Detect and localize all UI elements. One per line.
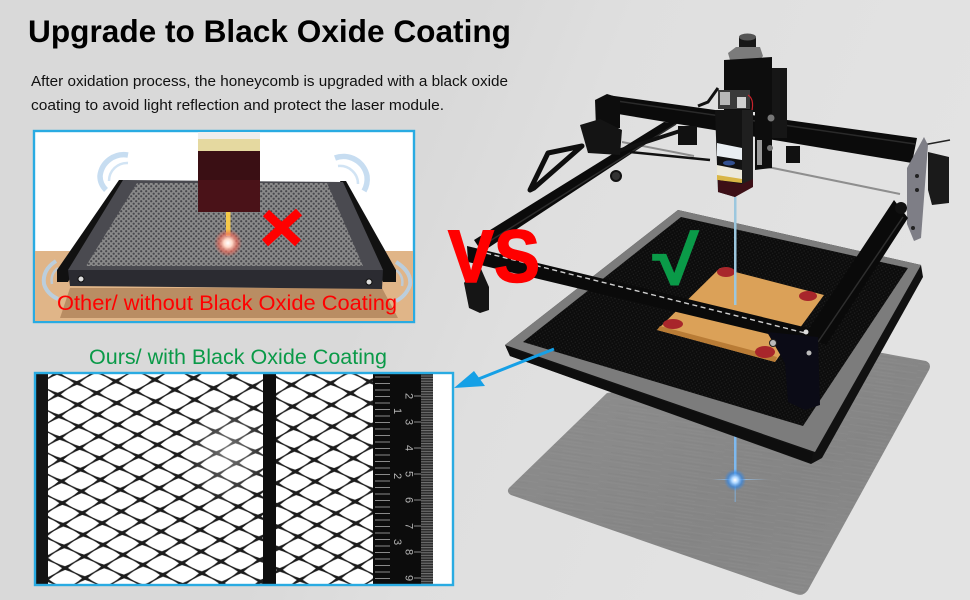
caption: other: Other/ without Black Oxide Coating [57,292,397,315]
heading: ours: Ours/ with Black Oxide Coating [89,346,387,369]
ruler [373,374,433,584]
upper laser beam [734,197,736,305]
ruler: 6 [402,497,414,503]
left rail [474,122,710,252]
description text: coating to avoid light reflection and protect the laser module. [31,97,444,114]
red clamps [663,267,817,358]
front gantry rail with belt [467,246,808,343]
honeycomb table without coating [57,180,396,289]
ruler: 8 [402,549,414,555]
description text [31,73,508,114]
drive belt loop [530,146,582,190]
back gantry rail [595,94,917,163]
wiring and fan [698,88,753,118]
icon: green check mark: √ [653,224,698,299]
laser beam and flare [214,212,242,257]
laser module body [715,110,753,197]
arrow: board to close-up [454,349,554,388]
VS label: VS [448,215,540,298]
ruler: 7 [402,523,414,529]
honeycomb mesh close-up [36,374,373,584]
front left leg [464,262,489,313]
ruler: 4 [402,445,414,451]
wood table [35,251,413,321]
right end plate and motor [907,137,950,241]
icon: red cross [265,212,299,243]
lower laser beam and blue flare [712,430,768,502]
ruler: 2 [391,473,403,479]
ruler: 3 [402,419,414,425]
ruler: 3 [391,539,403,545]
front right leg [767,330,820,410]
z-axis motor [728,34,763,60]
laser head assembly [698,34,787,197]
icon: blue reflection arcs [44,155,410,301]
panel: ours with black oxide coating close-up [35,373,453,585]
honeycomb board with frame [505,210,923,464]
right rail [805,200,908,345]
smooth rods [622,142,900,194]
panel: other without black oxide coating [34,130,414,322]
z-axis plates [724,57,787,170]
title: Upgrade to Black Oxide Coating [28,13,511,49]
ruler: 9 [402,575,414,581]
stepper motor left [580,119,622,155]
ruler: 2 [402,393,414,399]
metal sheet [508,352,930,595]
ruler: 1 [391,408,403,414]
ruler: 5 [402,471,414,477]
engraving machine illustration [464,34,950,595]
wood workpiece [657,268,824,362]
laser module [198,130,260,212]
description text: After oxidation process, the honeycomb is upgraded with a black oxide [31,73,508,90]
